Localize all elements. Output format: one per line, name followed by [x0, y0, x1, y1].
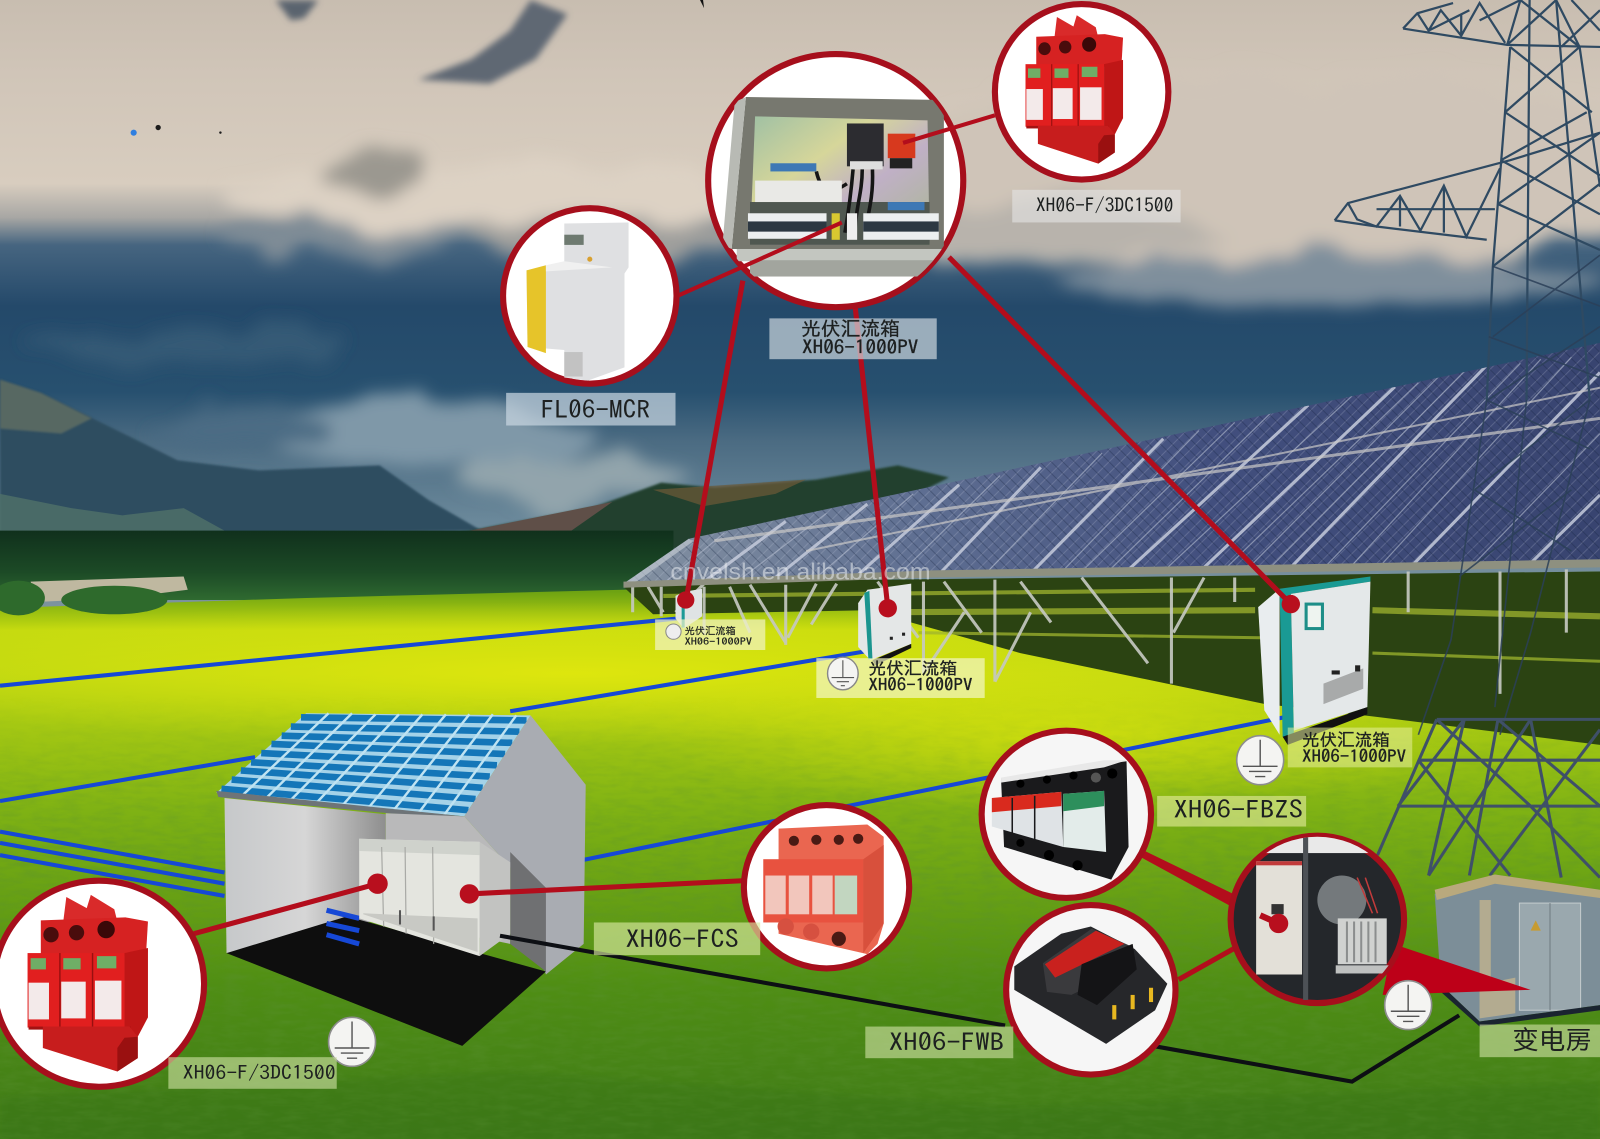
ground symbol substation: [1385, 981, 1432, 1030]
product: XH06-FBZS: [982, 731, 1151, 898]
label: right combiner: [1288, 728, 1412, 767]
label: XH06-F/3DC1500 top: XH06-F/3DC1500: [1036, 195, 1173, 215]
PV combiner box right: [1258, 577, 1370, 745]
panel shadow on ground: [624, 571, 1600, 745]
label: combiner box top: [769, 318, 937, 359]
substation: [1435, 875, 1600, 1027]
red wedge to substation: [1383, 944, 1531, 995]
product: XH06-FWB: [1006, 905, 1176, 1075]
red connection dots: [367, 591, 1300, 904]
red leader lines: [194, 257, 1291, 980]
label: XH06-FBZS: [1157, 796, 1306, 827]
label: XH06-FCS: XH06-FCS: [626, 926, 739, 951]
transmission pylon, lower: [1378, 719, 1600, 878]
product: combiner box: [678, 54, 995, 307]
label: small combiner: XH06-1000PV: [685, 637, 752, 647]
label: right combiner: XH06-1000PV: [1302, 748, 1406, 765]
label: middle combiner: 光伏汇流箱: [868, 660, 957, 678]
label: XH06-FBZS: XH06-FBZS: [1173, 796, 1303, 821]
label: small combiner: 光伏汇流箱: [685, 625, 736, 637]
bushes: [0, 581, 167, 615]
house interior walls: [224, 798, 546, 971]
label: substation: [1480, 1025, 1600, 1057]
label: middle combiner: [816, 657, 985, 698]
product: transformer cabinet: [1230, 835, 1408, 1003]
blue DC cables: [0, 618, 1284, 896]
ground symbol house: [329, 1017, 376, 1066]
house roof panels: [216, 713, 531, 820]
transmission pylon, upper: [1335, 0, 1600, 735]
red taper FBZS: [1141, 851, 1284, 931]
label: middle combiner: XH06-1000PV: [868, 677, 973, 694]
label: substation: 变电房: [1512, 1027, 1592, 1053]
label: FL06-MCR: FL06-MCR: [541, 396, 650, 421]
shadow light bands: [663, 590, 1600, 661]
dark swirl clouds top: [276, 0, 567, 84]
mountains: [0, 380, 949, 551]
ground symbol right combiner: [1237, 736, 1284, 785]
PV combiner box left: [676, 589, 702, 629]
storm clouds: [20, 77, 1600, 504]
label: XH06-F/3DC1500 bottom: [168, 1057, 337, 1089]
label: XH06-FCS: [594, 922, 760, 955]
product: FL06-MCR module: [503, 208, 677, 384]
house gable wall: [464, 715, 586, 975]
watermark: cnvelsh.en.alibaba.com: [670, 559, 931, 585]
label: combiner box top: XH06-1000PV: [802, 338, 919, 357]
forest: [0, 531, 673, 602]
label: XH06-FWB: XH06-FWB: [889, 1029, 1004, 1054]
label: small combiner: [655, 619, 765, 650]
racking supports: [633, 569, 1566, 694]
solar panel array: [612, 337, 1600, 588]
label: XH06-F/3DC1500 top: [1012, 190, 1181, 222]
product: XH06-FCS: [744, 805, 909, 968]
product: red SPD top right: [995, 4, 1168, 180]
label: combiner box top: 光伏汇流箱: [801, 319, 900, 339]
sky background: [0, 0, 1600, 612]
PV combiner box middle: [858, 584, 911, 665]
black earth cable: [500, 936, 1459, 1082]
grass field: [0, 571, 1600, 1139]
inverter cabinet: [359, 839, 510, 956]
label: right combiner: 光伏汇流箱: [1302, 731, 1390, 749]
house floor: [227, 916, 546, 1046]
label: XH06-FWB: [865, 1027, 1013, 1058]
product: red SPD bottom left: [0, 881, 204, 1087]
label: XH06-F/3DC1500 bottom: XH06-F/3DC1500: [183, 1063, 336, 1083]
label: FL06-MCR: [506, 393, 676, 426]
inverter cables: [327, 910, 359, 944]
sky specks: [131, 0, 704, 136]
